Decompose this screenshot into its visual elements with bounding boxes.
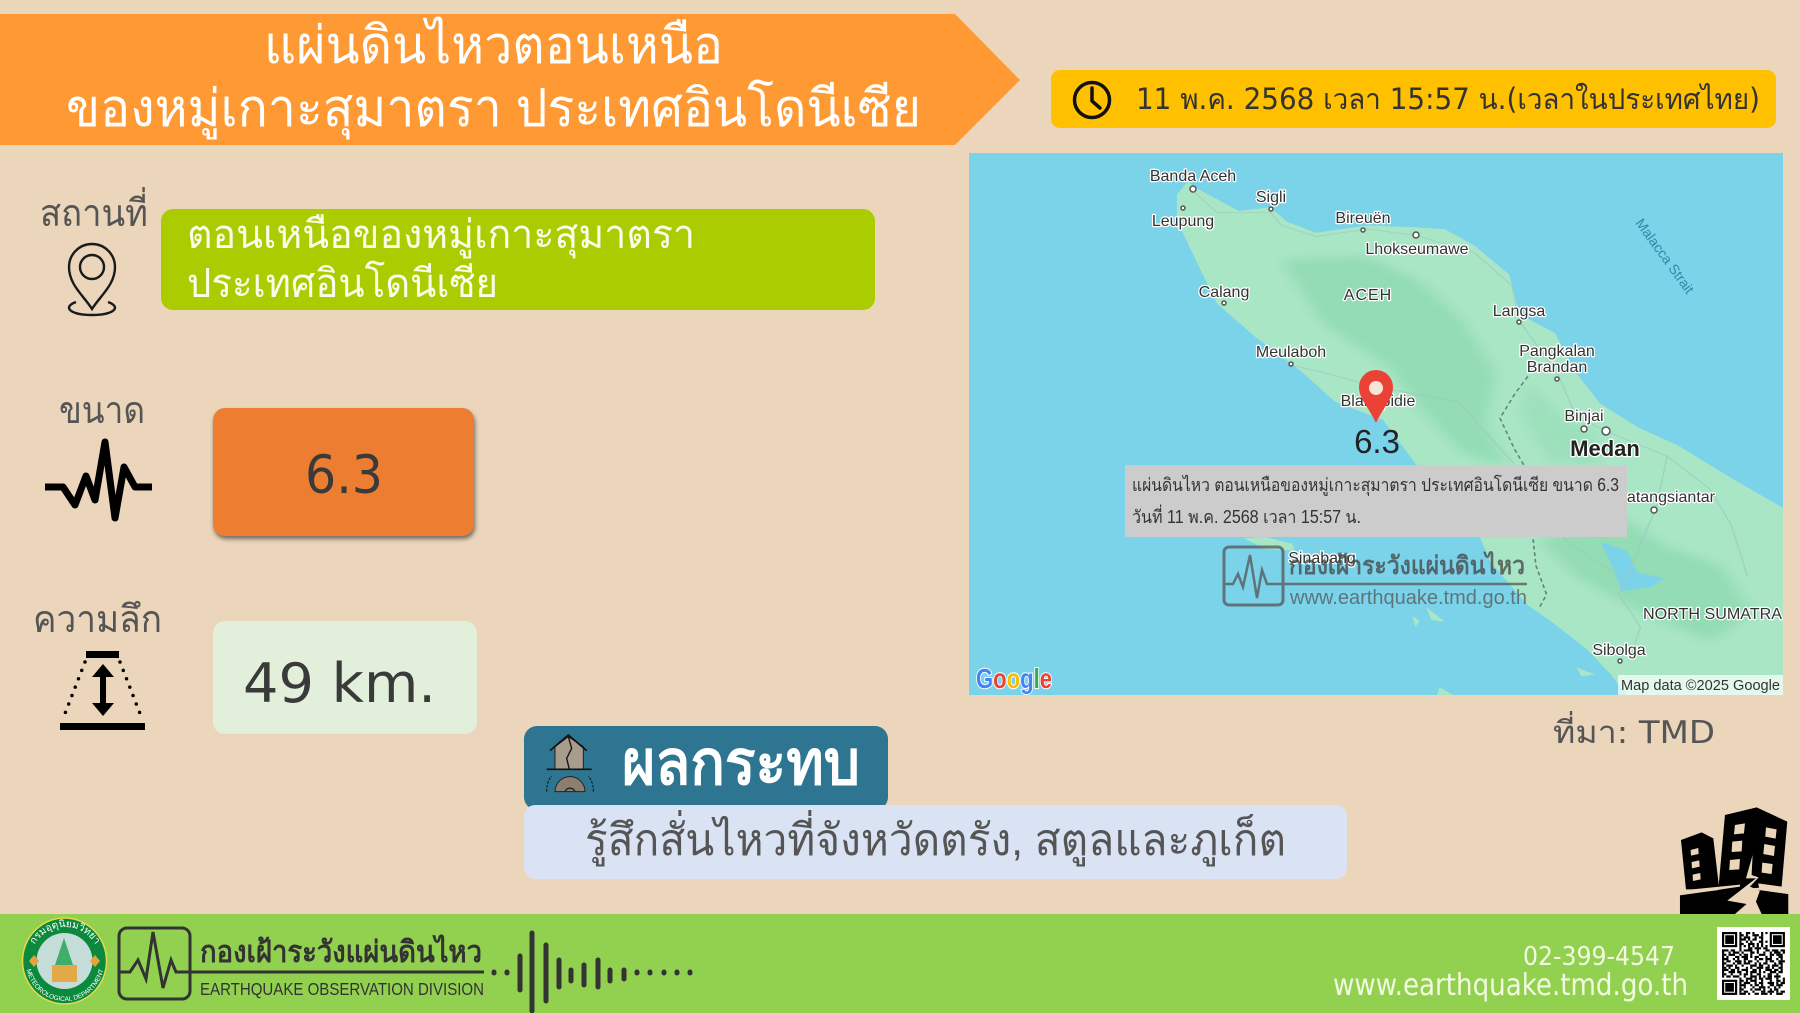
date and time pill <box>1051 70 1776 128</box>
map attribution: Map data ©2025 Google <box>1621 678 1780 694</box>
map panel <box>969 153 1785 700</box>
watermark: กองเฝ้าระวังแผ่นดินไหว <box>1289 550 1525 580</box>
map labels: Langsa <box>1493 303 1545 320</box>
impact header <box>524 726 888 810</box>
footer band <box>0 914 1800 1013</box>
panel: depth: 49 km. <box>243 652 436 715</box>
icon: department seal: กรมอุตุนิยมวิทยา <box>31 919 99 944</box>
sound wave decoration <box>494 933 690 1011</box>
map labels: Malacca Strait <box>1632 215 1698 297</box>
icon: depth <box>60 651 145 730</box>
panel: impact: ผลกระทบ <box>622 729 860 798</box>
panel: magnitude: 6.3 <box>305 445 383 506</box>
title banner: ของหมู่เกาะสุมาตรา ประเทศอินโดนีเซีย <box>66 79 921 140</box>
panel: impact <box>524 726 1347 879</box>
province border <box>1500 376 1547 609</box>
icon: department seal <box>22 917 108 1005</box>
event caption box: แผ่นดินไหว ตอนเหนือของหมู่เกาะสุมาตรา ประเทศอินโดนีเซีย ขนาด 6.3 <box>1132 474 1619 496</box>
icon: collapsing buildings <box>1680 807 1788 914</box>
magnitude on map: 6.3 <box>1354 423 1400 460</box>
map labels: Binjai <box>1564 408 1604 425</box>
map labels: Sigli <box>1256 189 1286 206</box>
location label: สถานที่ <box>40 187 148 235</box>
division logo <box>119 928 484 999</box>
icon: cracked house <box>547 735 593 792</box>
map labels: Bireuën <box>1335 210 1391 227</box>
depth label: ความลึก <box>33 599 162 641</box>
map labels: Blangpidie <box>1341 393 1415 410</box>
panel: impact: รู้สึกสั่นไหวที่จังหวัดตรัง, สตูลและภูเก็ต <box>585 809 1286 867</box>
panel: depth <box>33 599 477 734</box>
map labels: Meulaboh <box>1256 344 1326 361</box>
map labels: Leupung <box>1152 213 1214 230</box>
event caption box: วันที่ 11 พ.ค. 2568 เวลา 15:57 น. <box>1132 504 1361 527</box>
title banner: แผ่นดินไหวตอนเหนือ <box>264 16 723 75</box>
website: www.earthquake.tmd.go.th <box>1333 968 1688 1003</box>
panel: magnitude <box>45 390 474 536</box>
icon: seismic pulse <box>45 442 152 518</box>
division logo: EARTHQUAKE OBSERVATION DIVISION <box>200 979 484 999</box>
location value box <box>161 209 875 310</box>
depth value box <box>213 621 477 734</box>
map labels: Brandan <box>1527 359 1587 376</box>
source note: ที่มา: TMD <box>1553 711 1715 751</box>
land masses <box>1177 182 1785 700</box>
map labels: Calang <box>1199 284 1249 301</box>
watermark: www.earthquake.tmd.go.th <box>1289 587 1527 609</box>
division logo: กองเฝ้าระวังแผ่นดินไหว <box>200 934 482 969</box>
map labels <box>1150 168 1782 663</box>
map labels: Sinabang <box>1288 550 1356 567</box>
magnitude label: ขนาด <box>59 390 145 432</box>
map labels: Lhokseumawe <box>1365 241 1469 258</box>
lake toba <box>1600 542 1664 591</box>
map labels: Medan <box>1570 436 1640 461</box>
magnitude value box <box>213 408 474 536</box>
watermark <box>1224 547 1527 609</box>
map labels: NORTH SUMATRA <box>1643 606 1782 623</box>
icon: clock <box>1074 82 1110 118</box>
phone number: 02-399-4547 <box>1523 942 1675 972</box>
google logo: Google <box>976 663 1052 694</box>
qr code <box>1717 927 1790 1000</box>
map labels: ACEH <box>1344 287 1392 304</box>
icon: department seal: METEOROLOGICAL DEPARTMENT <box>26 968 103 1001</box>
title banner <box>0 14 1020 145</box>
map labels: Banda Aceh <box>1150 168 1236 185</box>
impact description <box>524 805 1347 879</box>
icon: map pin <box>69 244 115 315</box>
map labels: Sibolga <box>1592 642 1646 659</box>
icon: epicentre pin <box>1359 370 1393 423</box>
panel: location: ตอนเหนือของหมู่เกาะสุมาตรา <box>187 213 695 259</box>
map labels: Pangkalan <box>1519 343 1595 360</box>
panel: location <box>40 187 875 315</box>
date and time pill: 11 พ.ค. 2568 เวลา 15:57 น.(เวลาในประเทศไทย) <box>1136 82 1760 116</box>
panel: location: ประเทศอินโดนีเซีย <box>187 261 498 306</box>
event caption box <box>1125 465 1627 537</box>
roads and rivers <box>1193 191 1747 660</box>
map labels: Pematangsiantar <box>1594 489 1716 506</box>
